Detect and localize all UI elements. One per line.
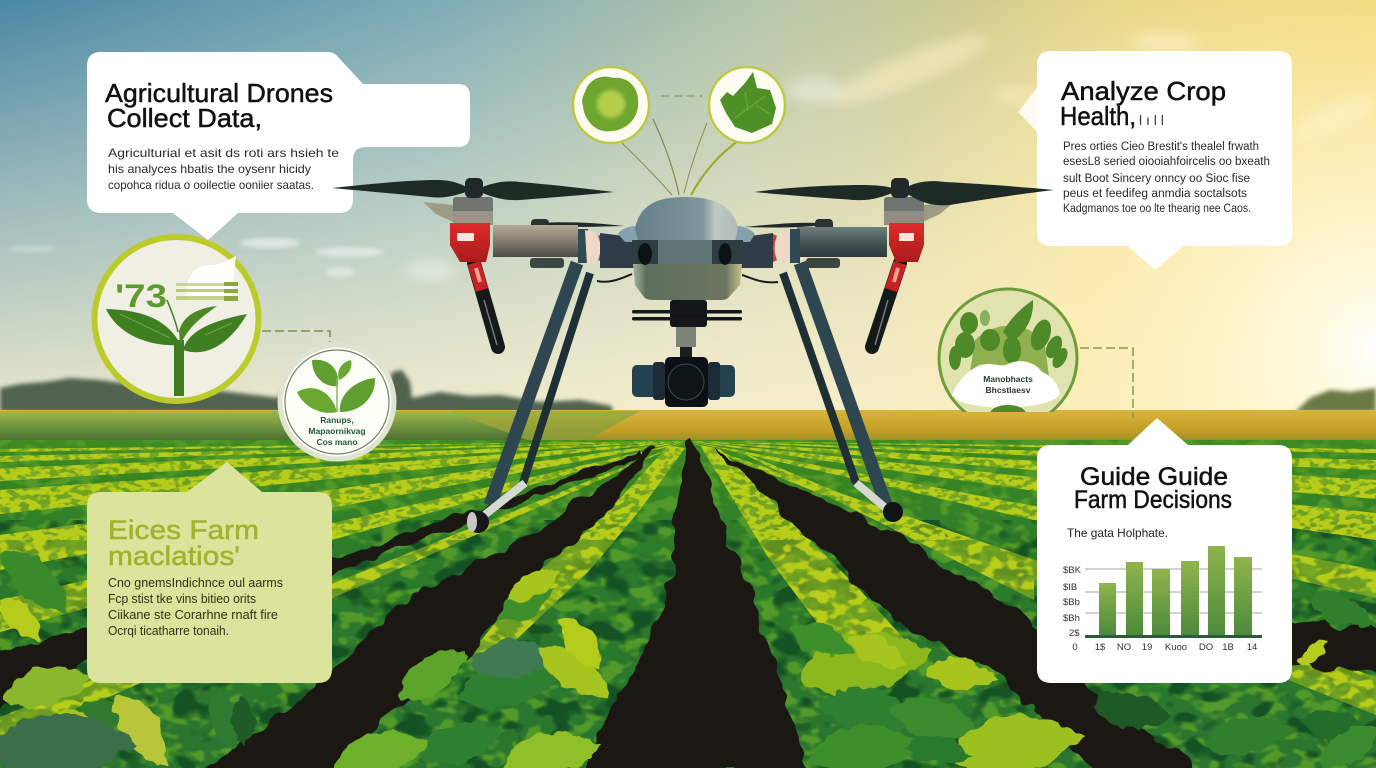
small circle caption: Cos mano <box>316 437 358 447</box>
foreground leaves <box>0 538 1376 768</box>
small plant icon circle <box>280 345 394 459</box>
heading: Agricultural Drones <box>105 78 333 108</box>
bar chart: 2$ <box>1069 628 1080 639</box>
green leaf texture <box>0 440 1376 768</box>
distant trees <box>0 370 1376 414</box>
bar chart: 19 <box>1142 642 1152 653</box>
panel: agricultural drones collect data <box>87 52 470 240</box>
body text: esesL8 seried oiooiahfoircelis oo bxeath <box>1063 156 1270 168</box>
heading: maclatios' <box>108 541 240 571</box>
bar chart: Kuoo <box>1165 642 1187 653</box>
left legs <box>467 263 590 533</box>
bar chart: $Bh <box>1063 613 1080 624</box>
small marks: l ı l l <box>1139 112 1164 128</box>
heading: Collect Data, <box>107 103 262 133</box>
right motor and arm <box>735 197 954 268</box>
panel: guide farm decisions <box>1037 418 1292 683</box>
lower-right leaves <box>1087 584 1376 768</box>
lower-left leaves <box>0 538 257 768</box>
body text: Agriculturial et asit ds roti ars hsieh te <box>108 146 339 160</box>
bar chart: 0 <box>1072 642 1078 653</box>
left motor and arm <box>423 197 640 268</box>
background fields <box>0 410 1376 444</box>
bar chart: $BK <box>1063 565 1082 576</box>
bar chart: DO <box>1199 642 1213 653</box>
lit row tops <box>0 441 1376 736</box>
right legs <box>783 263 903 522</box>
soil furrows <box>0 440 1376 768</box>
large plant icon circle <box>94 237 258 401</box>
heading: Guide Guide <box>1080 463 1228 491</box>
body text: copohca ridua o ooilectie ooniier saatas. <box>108 178 314 192</box>
bar chart: 1B <box>1222 642 1234 653</box>
small circle caption: Ranups, <box>320 415 354 425</box>
gimbal and camera <box>632 300 742 407</box>
crop rows <box>0 440 1376 768</box>
bar chart: NO <box>1117 642 1131 653</box>
heading: Analyze Crop <box>1061 76 1226 106</box>
body text: Ciikane ste Corarhne rnaft fire <box>108 608 278 622</box>
body text: sult Boot Sincery onncy oo Sioc fise <box>1063 173 1250 185</box>
body text: Fcp stist tke vins bitieo orits <box>108 592 256 606</box>
bar chart: $IB <box>1063 582 1077 593</box>
icon: lettuce circle <box>573 67 649 143</box>
center-left row leaves <box>329 559 620 768</box>
heading: Eices Farm <box>108 515 259 545</box>
bar chart: 1$ <box>1095 642 1106 653</box>
body text: Cno gnemsIndichnce oul aarms <box>108 576 283 590</box>
center-right row leaves <box>786 614 1088 768</box>
right lower pod <box>872 263 900 347</box>
icon number: '73 <box>115 278 167 314</box>
icon: leaf circle <box>709 67 785 143</box>
right circle caption: Manobhacts <box>983 374 1033 384</box>
body text: Kadgmanos toe oo lte thearig nee Caos. <box>1063 203 1251 215</box>
chart subtitle: The gata Holphate. <box>1067 526 1168 540</box>
central body <box>597 197 778 300</box>
panel: analyze crop health <box>1018 51 1292 270</box>
rotor blades <box>332 178 1054 205</box>
green rows <box>0 440 1376 768</box>
dashed connector left <box>262 331 330 342</box>
crop analysis icon circle <box>939 289 1077 427</box>
bar chart <box>1063 546 1262 653</box>
sky background <box>0 0 1376 420</box>
heading: Farm Decisions <box>1074 486 1232 514</box>
body text: Ocrqi ticatharre tonaih. <box>108 624 229 638</box>
right circle caption: Bhcstlaesv <box>986 385 1031 395</box>
bar chart: $Bb <box>1063 597 1080 608</box>
panel: farm practices <box>87 462 332 683</box>
rear rotors <box>530 219 840 268</box>
body text: his analyces hbatis the oysenr hicidy <box>108 162 311 176</box>
bar chart: 14 <box>1247 642 1257 653</box>
left lower pod <box>474 263 498 347</box>
body text: peus et feedifeg anmdia soctalsots <box>1063 188 1247 200</box>
connector lines to top circles <box>622 96 742 195</box>
drone <box>332 178 1054 533</box>
heading: Health, <box>1060 101 1136 131</box>
body text: Pres orties Cieo Brestit's thealel frwath <box>1063 141 1259 153</box>
small circle caption: Mapaornikvag <box>308 426 366 436</box>
dashed connector right <box>1080 348 1133 418</box>
